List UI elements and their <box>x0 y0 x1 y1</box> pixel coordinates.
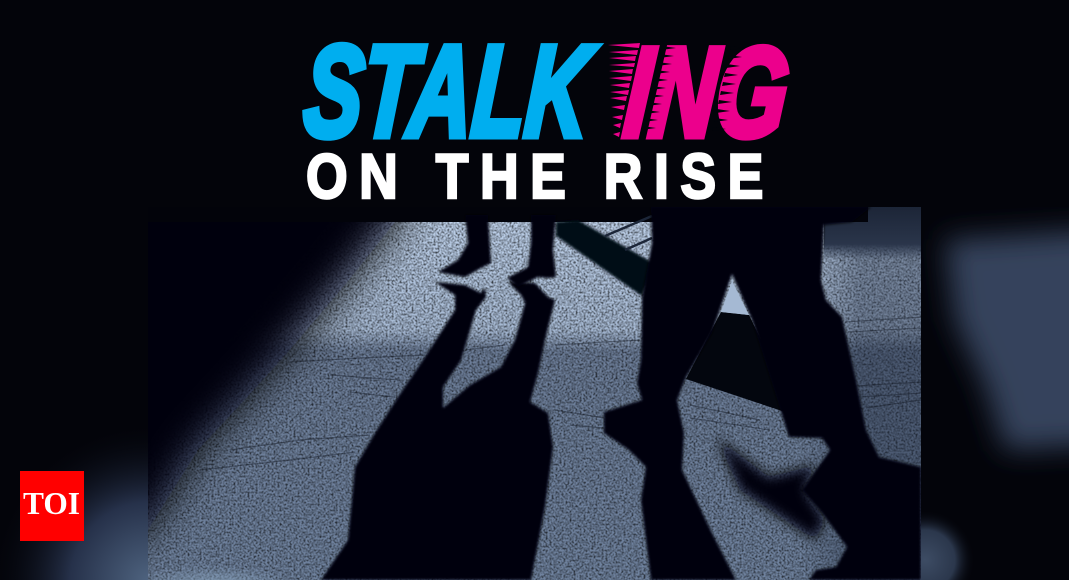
blurred light patch <box>945 230 1069 450</box>
ING letters: ING <box>620 21 794 163</box>
bright patch bottom left <box>149 568 282 580</box>
shadow of woman <box>321 282 555 580</box>
soft shadow between man's legs <box>716 437 825 540</box>
man's legs silhouette <box>604 207 921 580</box>
blurred backdrop: right <box>921 230 1069 580</box>
pavement texture <box>148 222 921 580</box>
pavement cracks <box>200 317 921 470</box>
light falloff: dark diagonal band <box>148 222 432 562</box>
dim right side of pavement <box>812 228 921 580</box>
dim upper right wedge <box>824 207 921 260</box>
subtitle: ON THE RISE: ON THE RISE <box>306 142 763 212</box>
speed lines left of I <box>608 43 640 137</box>
blurred lower patch <box>921 517 968 580</box>
top dark strip <box>824 207 868 222</box>
title: ING with speed lines <box>608 21 794 163</box>
lit triangle between man's legs <box>721 281 749 315</box>
logo square <box>20 471 84 541</box>
pavement <box>148 222 921 580</box>
shadow of strut <box>556 220 655 296</box>
speed cuts left of G <box>712 46 744 131</box>
photo: shadows of two walkers on the pavement <box>148 207 921 580</box>
logo text: TOI <box>23 485 80 521</box>
blurred backdrop: left <box>0 380 148 580</box>
TOI logo <box>20 471 84 541</box>
thin railing shadows <box>605 216 652 250</box>
title: STALK: STALK <box>300 18 600 164</box>
woman's left leg and heel <box>438 215 491 277</box>
dark area under man's stride <box>686 312 790 412</box>
woman's right leg and heel <box>507 215 556 287</box>
speed cuts left of N <box>641 46 676 130</box>
